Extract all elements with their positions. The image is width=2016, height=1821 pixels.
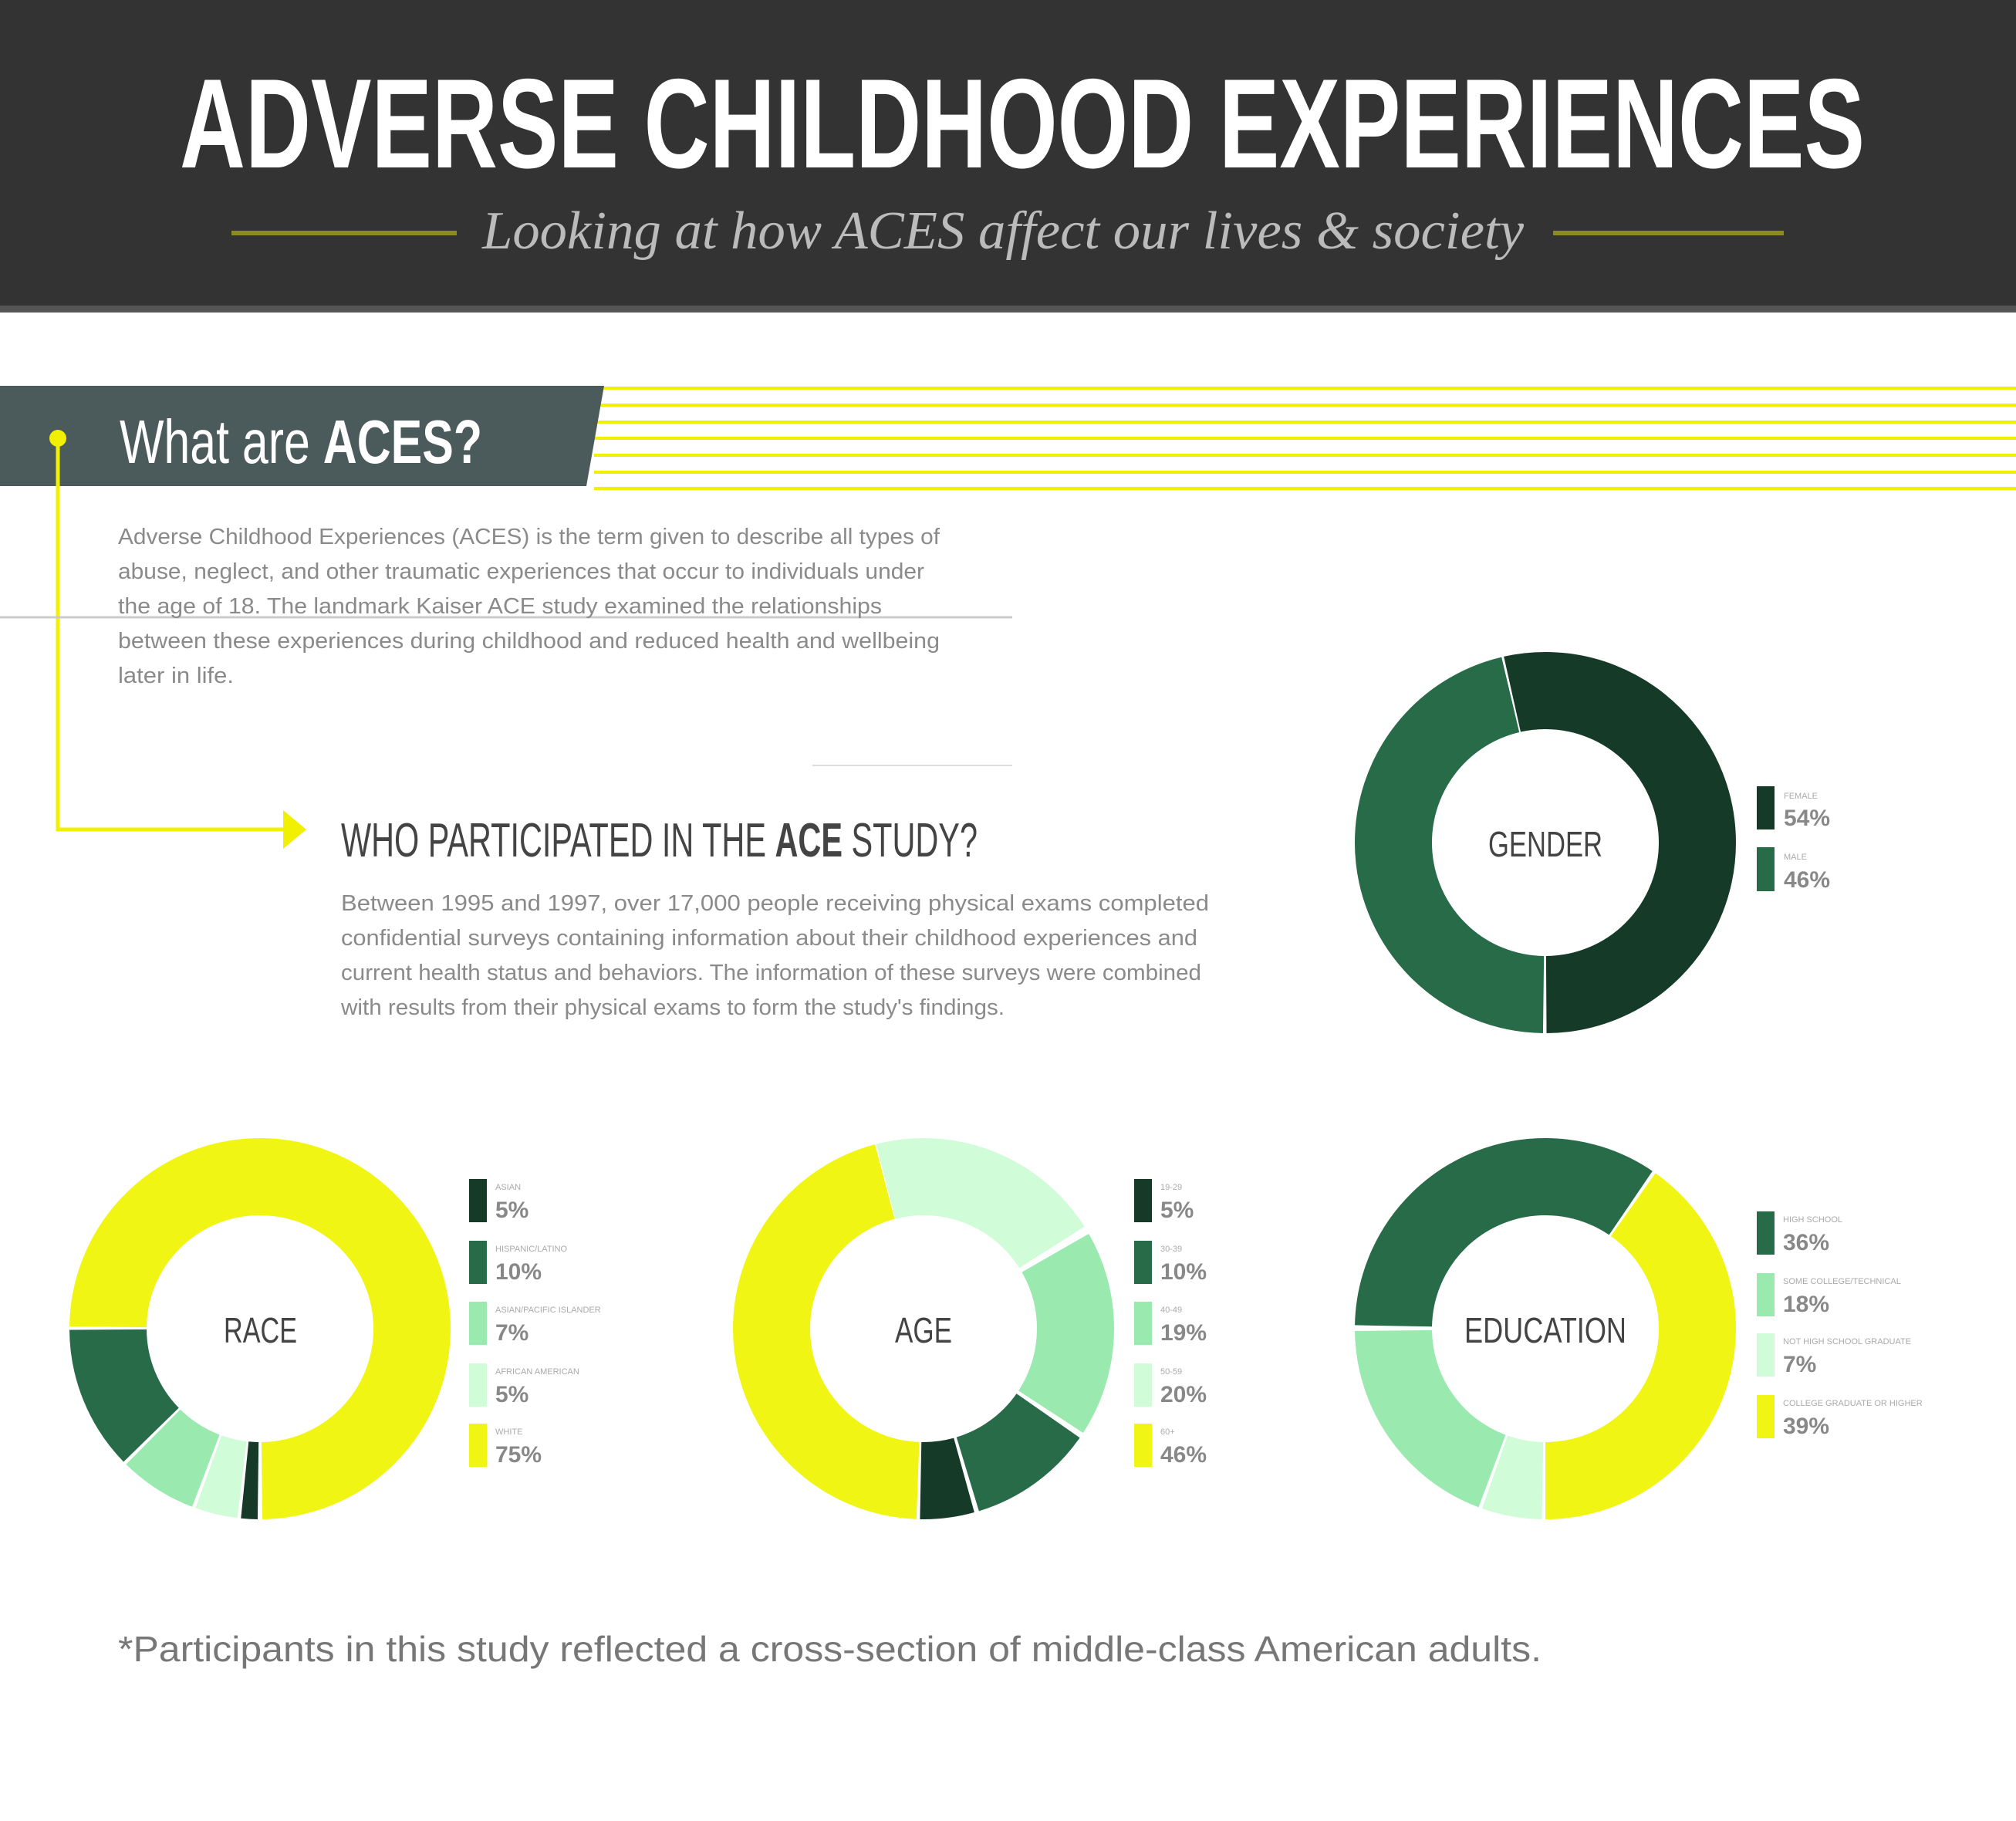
legend: education: 36% [1783, 1230, 1829, 1255]
text: who participated [340, 891, 1209, 1020]
subtitle: Looking at how ACES affect our lives & society [481, 201, 1525, 261]
legend: age: 10% [1160, 1259, 1207, 1285]
legend: gender: FEMALE [1784, 792, 1818, 801]
legend: education: 7% [1783, 1352, 1816, 1377]
chart: race donut [108, 1177, 412, 1481]
footnote: *Participants in this study reflected a cross-section of middle-class American adults. [118, 1629, 1542, 1669]
legend: race: HISPANIC/LATINO [495, 1245, 568, 1254]
legend: education [1757, 1211, 1923, 1439]
legend: education: SOME COLLEGE/TECHNICAL [1783, 1277, 1901, 1286]
legend: race [469, 1179, 601, 1468]
legend: age: 60+ [1160, 1427, 1175, 1437]
text: who participated: confidential surveys containing information about their childhood experiences and [341, 926, 1197, 951]
chart: age donut [772, 1177, 1076, 1481]
legend: age: 19-29 [1160, 1183, 1182, 1192]
legend: gender: MALE [1784, 853, 1807, 862]
text: who participated: with results from their physical exams to form the study's findings. [340, 995, 1005, 1020]
header bar [0, 0, 2016, 313]
heading: who participated: WHO PARTICIPATED IN THE ACE STUDY? [341, 814, 978, 867]
text: what are aces [118, 525, 940, 688]
chart: gender donut: GENDER [1488, 824, 1602, 864]
text: what are aces: later in life. [118, 664, 234, 688]
legend: race: ASIAN [495, 1183, 521, 1192]
legend: gender [1757, 786, 1830, 893]
legend: age: 19% [1160, 1320, 1207, 1346]
legend: age: 46% [1160, 1442, 1207, 1468]
chart: education donut [1393, 1177, 1697, 1481]
banner: What are ACES?: What are ACES? [120, 407, 482, 476]
legend: age: 20% [1160, 1382, 1207, 1407]
text: what are aces: abuse, neglect, and other traumatic experiences that occur to individuals under [118, 559, 924, 584]
legend: education: 18% [1783, 1292, 1829, 1317]
legend: race: 5% [495, 1198, 528, 1223]
legend: race: 10% [495, 1259, 542, 1285]
legend: age [1134, 1179, 1207, 1468]
legend: race: WHITE [495, 1427, 522, 1437]
legend: education: HIGH SCHOOL [1783, 1215, 1842, 1225]
text: who participated: Between 1995 and 1997, over 17,000 people receiving physical exams completed [341, 891, 1209, 916]
decorative yellow lines [594, 388, 2016, 488]
chart: age donut: AGE [895, 1310, 952, 1350]
legend: age: 50-59 [1160, 1367, 1182, 1377]
banner: What are ACES? [0, 386, 604, 486]
legend: age: 5% [1160, 1198, 1194, 1223]
legend: race: 7% [495, 1320, 528, 1346]
legend: age: 30-39 [1160, 1245, 1182, 1254]
legend: race: 75% [495, 1442, 542, 1468]
connector arrow [49, 430, 306, 849]
legend: education: COLLEGE GRADUATE OR HIGHER [1783, 1399, 1923, 1408]
text: what are aces: Adverse Childhood Experiences (ACES) is the term given to describe all types of [118, 525, 940, 549]
chart: education donut: EDUCATION [1464, 1310, 1626, 1350]
legend: race: AFRICAN AMERICAN [495, 1367, 579, 1377]
text: who participated: current health status and behaviors. The information of these surveys were combined [341, 961, 1201, 985]
legend: age: 40-49 [1160, 1306, 1182, 1315]
legend: race: ASIAN/PACIFIC ISLANDER [495, 1306, 601, 1315]
legend: education: 39% [1783, 1414, 1829, 1439]
text: what are aces: the age of 18. The landmark Kaiser ACE study examined the relationships [118, 594, 882, 619]
legend: gender: 54% [1784, 806, 1830, 831]
legend: race: 5% [495, 1382, 528, 1407]
text: what are aces: between these experiences during childhood and reduced health and wellbeing [118, 629, 940, 654]
chart: race donut: RACE [224, 1310, 297, 1350]
chart: gender donut [1393, 691, 1697, 995]
legend: gender: 46% [1784, 867, 1830, 893]
legend: education: NOT HIGH SCHOOL GRADUATE [1783, 1337, 1911, 1346]
